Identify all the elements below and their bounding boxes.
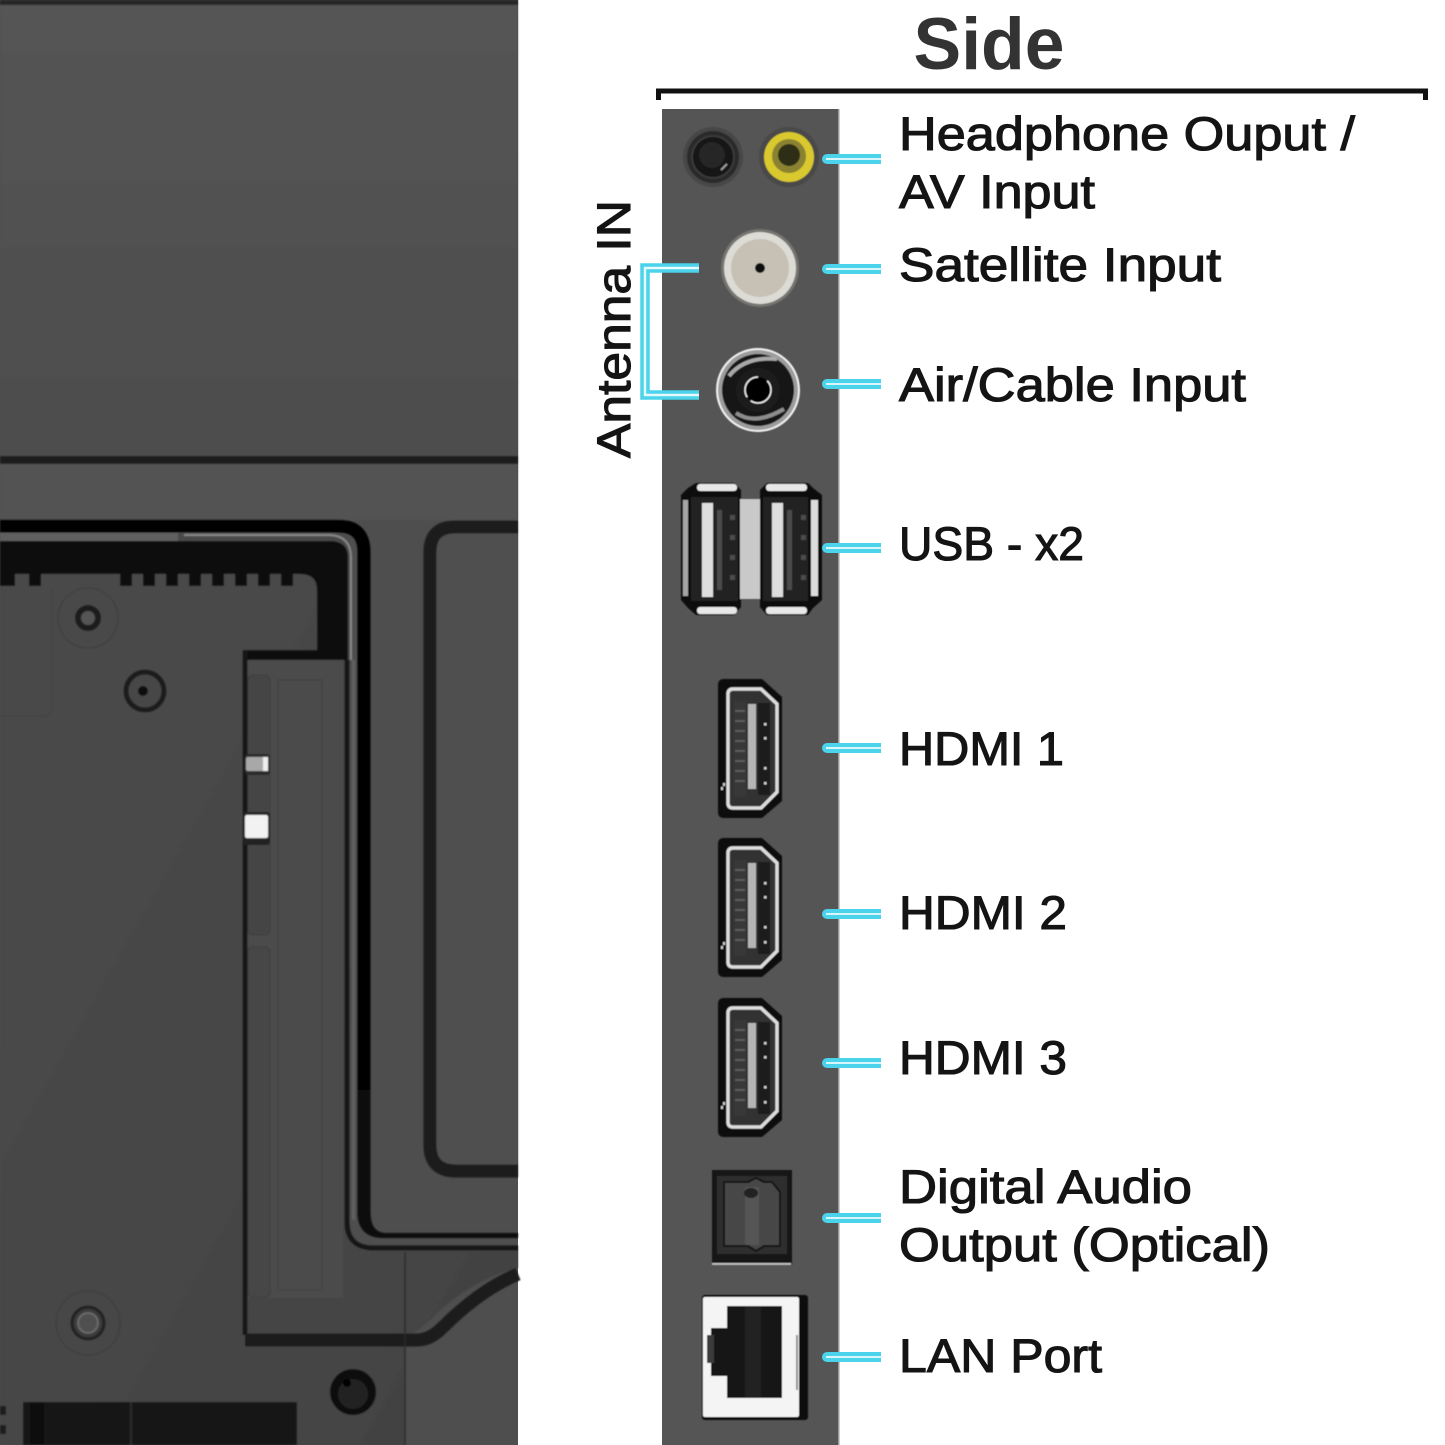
right rounded panel (430, 527, 518, 1171)
connector: air/cable (822, 379, 881, 389)
screws (58, 588, 118, 648)
connector: digital audio (822, 1213, 881, 1223)
label: Satellite Input: Satellite Input (899, 238, 1221, 291)
connector: USB (822, 543, 881, 553)
label: Digital Audio Output (Optical) (899, 1160, 1270, 1271)
icon: dual USB ports (681, 483, 822, 615)
label: Digital Audio Output (Optical): Output (Optical) (899, 1218, 1270, 1271)
label: Antenna IN: Antenna IN (587, 200, 640, 458)
metal contacts (245, 754, 270, 775)
panel: TV rear close-up photo (0, 0, 518, 1445)
label: Headphone Output / AV Input: AV Input (899, 165, 1095, 218)
outer black channel (0, 526, 364, 1100)
icon: HDMI 3 port (718, 998, 782, 1137)
heading: Side: Side (914, 4, 1064, 85)
USB centre bridge (740, 499, 760, 599)
label: Headphone Output / AV Input (899, 107, 1356, 218)
USB port right (760, 483, 822, 615)
label: Digital Audio Output (Optical): Digital Audio (899, 1160, 1192, 1213)
label: HDMI 2: HDMI 2 (899, 886, 1067, 939)
icon: satellite F-connector (721, 229, 799, 307)
icon: optical audio port (712, 1170, 792, 1265)
connector: HDMI 2 (822, 909, 881, 919)
connector: satellite (822, 264, 881, 274)
icon: HDMI 2 port (718, 838, 782, 977)
connector: headphone / AV (822, 154, 881, 164)
icon: LAN port (702, 1295, 808, 1420)
bottom dark slot (23, 1402, 297, 1445)
icon: headphone jack (683, 127, 743, 187)
inner black block with comb teeth (0, 541, 348, 660)
label: Headphone Output / AV Input: Headphone Ouput / (899, 107, 1356, 160)
seam line (404, 1252, 406, 1445)
faint outline (0, 590, 52, 716)
label: Air/Cable Input: Air/Cable Input (899, 358, 1246, 411)
icon: air/cable coax connector (717, 349, 799, 431)
recessed plate (0, 533, 518, 1445)
icon: HDMI 1 port (718, 679, 782, 818)
connector: HDMI 3 (822, 1058, 881, 1068)
panel: side connector strip (662, 109, 840, 1445)
icon: yellow AV jack (759, 127, 819, 187)
USB port left (681, 483, 741, 615)
label: HDMI 1: HDMI 1 (899, 722, 1064, 775)
connector: LAN (822, 1352, 881, 1362)
label: LAN Port: LAN Port (899, 1329, 1102, 1382)
label: HDMI 3: HDMI 3 (899, 1031, 1067, 1084)
connector: HDMI 1 (822, 743, 881, 753)
slot panel (248, 660, 343, 1298)
label: USB - x2: USB - x2 (899, 517, 1084, 570)
heading bracket (658, 91, 1426, 100)
bracket: antenna inputs (645, 268, 699, 395)
